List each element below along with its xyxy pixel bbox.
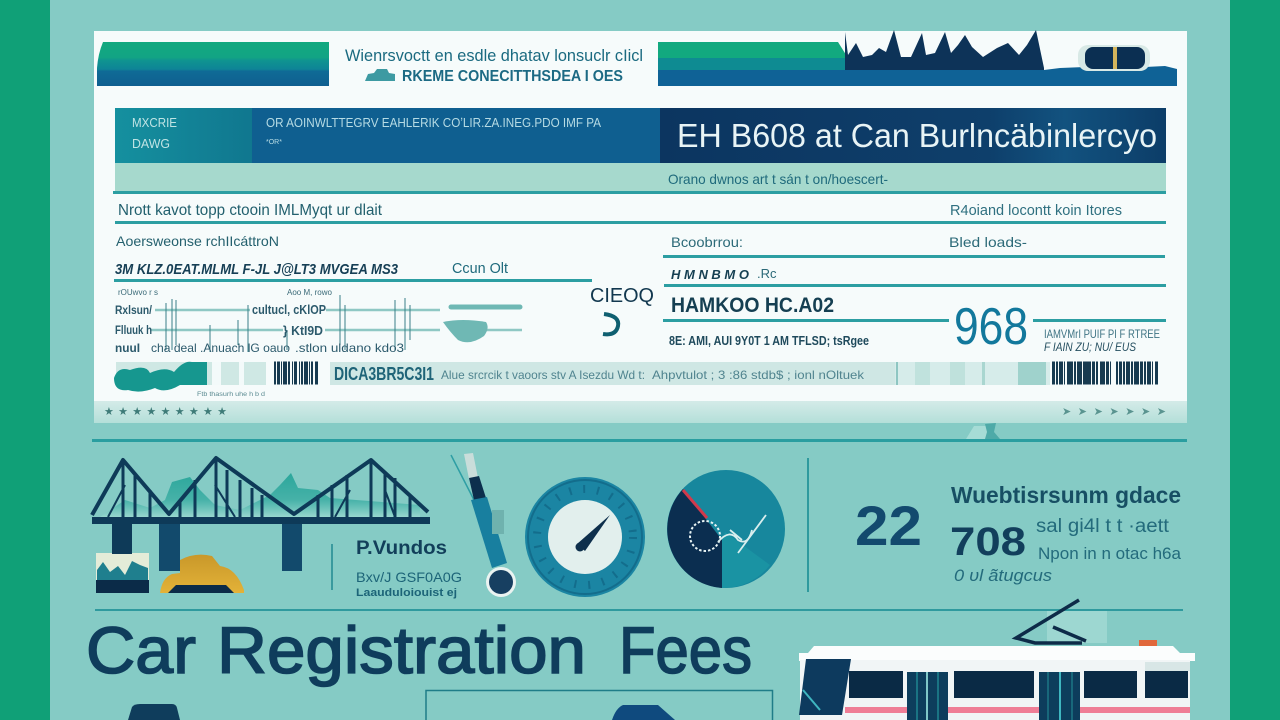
door 2	[1039, 672, 1080, 720]
field: signature waveform block: Aoo M, rowo	[287, 288, 333, 297]
main title: Car	[86, 613, 196, 687]
section divider	[95, 609, 1183, 611]
serial panel: Ahpvtulot ; 3 :86 stdb$ ; ionl nOltuek	[652, 368, 865, 382]
windshield	[799, 659, 851, 715]
main title	[86, 613, 752, 687]
pantograph	[1016, 600, 1086, 643]
field: signature waveform block: nuuI	[115, 341, 140, 355]
deck	[92, 517, 430, 524]
chart: pie dial	[667, 470, 785, 588]
icon: pen tool	[451, 453, 516, 597]
band: light subtitle: Orano dwnos art t sán t on/hoescert-	[668, 171, 888, 187]
stat: 708 block: Wuebtisrsunm gdace	[951, 482, 1181, 508]
panel: registration document	[94, 30, 1187, 423]
field: right details: H M N B M O	[671, 267, 751, 282]
field: signature waveform block: cha deal .Anuach lG oauo	[151, 341, 290, 355]
field row: labels: R4oiand locontt koin Itores	[950, 202, 1122, 219]
small note: F IAIN ZU; NU/ EUS	[1044, 340, 1136, 354]
main title: Fees	[619, 613, 752, 687]
left ticket tab: Ftb thasurh uhe h b d	[197, 391, 265, 398]
skyline	[845, 30, 1044, 70]
field: right details	[669, 234, 1027, 348]
decorative arrows left: ★★★★★★★★★	[104, 406, 230, 418]
small note	[1044, 327, 1160, 354]
stat: 708 block: 708	[950, 520, 1026, 564]
pink stripe	[845, 707, 1190, 713]
stamp numeral: CIEOQ	[590, 285, 654, 307]
door 1	[907, 672, 948, 720]
icon: bridge	[92, 458, 430, 593]
field: signature waveform block: .stlon uldano kdo3	[295, 341, 404, 355]
icon: small building	[365, 69, 395, 81]
barcode right	[1052, 362, 1158, 384]
section divider	[92, 439, 1187, 442]
stat: 708 block	[950, 482, 1182, 585]
icon: capsule	[1078, 45, 1150, 71]
stamp numeral	[590, 285, 654, 334]
icon: dark shape left	[128, 704, 180, 720]
roof vent	[1139, 640, 1157, 646]
field: owner	[115, 233, 509, 278]
field row: labels	[118, 202, 1122, 219]
stat: 708 block: Npon in n otac h6a	[1038, 544, 1182, 563]
panel: bottom box	[426, 690, 772, 720]
decorative arrows right: ➤➤➤➤➤➤➤	[1062, 406, 1170, 418]
rule lines	[113, 191, 1166, 322]
body	[800, 660, 1190, 720]
strip: serial and barcodes	[114, 362, 1158, 398]
light patch behind pantograph	[1047, 611, 1107, 643]
header text: Wienrsvoctt en esdle dhatav lonsuclr cIicl	[345, 46, 643, 65]
field: owner: Ccun Olt	[452, 260, 509, 277]
field: owner: Aoersweonse rchIIcáttroN	[116, 233, 279, 249]
icon: small marker under document	[966, 423, 1000, 439]
bridge caption: Laauduloiouist ej	[356, 587, 457, 599]
header ribbon: right with skyline	[658, 30, 1177, 86]
header text	[345, 46, 643, 85]
band: blue title block: DAWG	[132, 136, 170, 151]
windows	[849, 671, 903, 698]
divider	[331, 544, 333, 590]
main title: Registration	[217, 613, 586, 687]
base building	[96, 553, 149, 593]
field: signature waveform block: } KtI9D	[283, 323, 323, 338]
left green band	[0, 0, 50, 720]
bottom strip of document	[94, 401, 1187, 423]
field: right details: HAMKOO HC.A02	[671, 294, 834, 317]
stat: 708 block: 0 υl ãtugcus	[954, 566, 1053, 585]
field: right details: .Rc	[757, 266, 777, 281]
serial panel: Alue srcrcik t vaoors stv A Isezdu Wd t:	[441, 368, 645, 382]
header text: RKEME CONECITTHSDEA I OES	[402, 68, 623, 85]
segment blocks	[895, 362, 1050, 385]
barcode left	[274, 362, 318, 384]
stat: 22: 22	[855, 494, 922, 557]
field row: labels: Nrott kavot topp ctooin IMLMyqt ur dlait	[118, 202, 383, 219]
field: signature waveform block: Flluuk h	[115, 323, 152, 337]
divider	[807, 458, 809, 592]
field: right details: Bled loads-	[949, 234, 1027, 250]
field: signature waveform block: rOUwvo r s	[118, 288, 158, 297]
band: blue title block: *OR*	[266, 139, 282, 146]
bridge caption	[356, 538, 462, 599]
bridge caption: Bxv/J GSF0A0G	[356, 569, 462, 585]
field: right details: Bcoobrrou:	[671, 234, 743, 250]
stat: 708 block: sal gi4l t t ·aett	[1036, 516, 1170, 537]
header ribbon: left	[97, 42, 329, 86]
skyline behind bridge	[100, 473, 420, 517]
band: blue title block: MXCRIE	[132, 115, 177, 130]
field: signature waveform block	[115, 288, 522, 355]
field: right details: 8E: AMI, AUI 9Y0T 1 AM TFLSD; tsRgee	[669, 333, 869, 348]
band: blue title block: OR AOINWLTTEGRV EAHLERIK COʼLIR.ZA.INEG.PDO IMF PA	[266, 115, 601, 130]
document title: EH B608 at Can Burlncäbinlercyo	[677, 117, 1157, 154]
small note: IAMVMrI PUIF PI F RTREE	[1044, 327, 1160, 341]
big number 968: 968	[954, 298, 1028, 356]
roof	[799, 646, 1195, 661]
left ticket tab	[114, 362, 266, 398]
piers	[112, 524, 132, 554]
bridge caption: P.Vundos	[356, 538, 447, 559]
serial panel: DICA3BR5C3I1	[334, 364, 434, 384]
icon: gauge	[525, 477, 645, 597]
right green band	[1230, 0, 1280, 720]
field: signature waveform block: cultucl, cKlOP	[252, 302, 326, 317]
icon: tram	[799, 600, 1195, 720]
field: owner: 3M KLZ.0EAT.MLML F-JL J@LT3 MVGEA MS3	[115, 261, 399, 278]
band: blue title block	[115, 108, 1166, 163]
band: light subtitle	[115, 163, 1166, 191]
yellow car	[160, 555, 244, 593]
icon: dark shape in box	[612, 705, 675, 720]
serial panel	[330, 362, 895, 385]
field: signature waveform block: Rxlsun/	[115, 303, 153, 317]
